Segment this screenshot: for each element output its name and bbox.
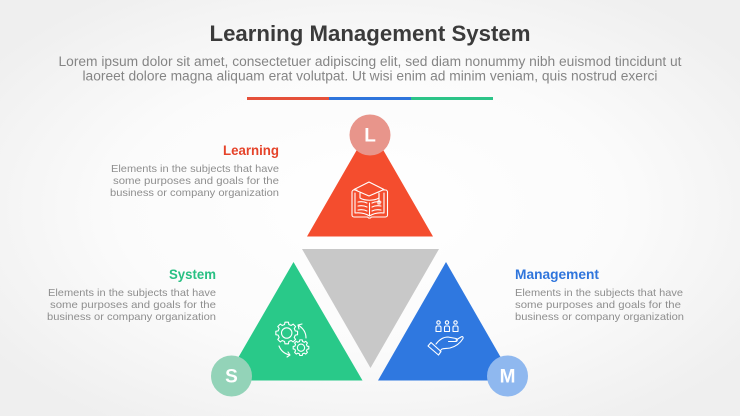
label: learning: Elements in the subjects that have: [111, 164, 279, 175]
icon: gears with arrows: [276, 322, 309, 357]
label: management: [515, 266, 684, 323]
label: learning: business or company organization: [110, 188, 279, 199]
label: management: business or company organization: [515, 312, 684, 323]
panel: management triangle: [378, 262, 528, 396]
letter badge S: S: [225, 366, 238, 388]
label: management: Management: [515, 266, 599, 282]
label: learning: [110, 142, 279, 199]
icon: book with graduation cap: [352, 182, 388, 218]
panel: system triangle: [211, 262, 362, 396]
subtitle text block: Lorem ipsum dolor sit amet, consectetuer adipiscing elit, sed diam nonummy nibh euismod tincidunt ut: [58, 54, 682, 69]
letter badge L: [350, 114, 390, 156]
label: system: System: [169, 266, 216, 282]
label: system: Elements in the subjects that have: [48, 288, 216, 299]
panel: gray center triangle: [302, 249, 439, 368]
letter badge S: [211, 356, 252, 396]
title: Learning Management System: [210, 21, 530, 46]
panel: learning triangle: [307, 127, 433, 236]
icon: hand holding people: [428, 321, 463, 355]
letter badge M: M: [500, 366, 515, 388]
label: learning: some purposes and goals for the: [113, 176, 279, 187]
label: system: business or company organization: [47, 312, 216, 323]
letter badge L: L: [364, 126, 376, 146]
letter badge M: [487, 356, 528, 396]
label: management: Elements in the subjects that have: [515, 288, 683, 299]
tricolor divider: [247, 97, 493, 100]
label: management: some purposes and goals for the: [515, 300, 681, 311]
label: system: some purposes and goals for the: [50, 300, 216, 311]
subtitle text block: [58, 54, 682, 84]
subtitle text block: laoreet dolore magna aliquam erat volutpat. Ut wisi enim ad minim veniam, quis nostrud exerci: [82, 68, 658, 84]
label: learning: Learning: [223, 142, 279, 158]
label: system: [47, 266, 216, 323]
